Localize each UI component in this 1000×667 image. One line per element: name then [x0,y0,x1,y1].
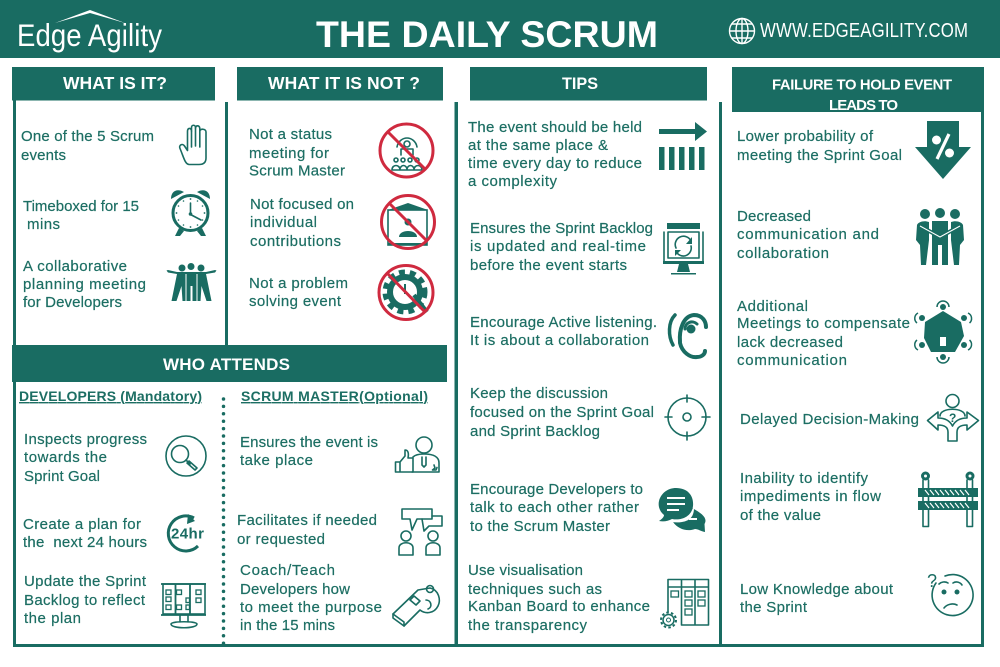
text: inability to identify impediments: Inability to identify [740,470,868,487]
text: collaborative planning meeting: planning meeting [23,276,146,293]
icon: speech bubbles [659,488,705,532]
text: ensures the event: take place [240,452,313,469]
header band [0,0,1000,58]
icon: 24 hours [168,514,204,551]
text: facilitates if needed: Facilitates if needed [237,512,377,529]
icon: confused face: ? [927,571,937,591]
icon: no status meeting [380,124,433,177]
text: not focused on individual contributions: individual [250,214,317,231]
text: same place and time [468,119,642,190]
heading: tips: TIPS [562,75,598,93]
text: sprint backlog updated: before the event starts [470,257,627,274]
text: decreased communication: collaboration [737,245,829,262]
text: not a status meeting: Scrum Master [249,162,345,180]
icon: whistle [393,586,439,626]
icon: 24 hours: 24hr [171,526,204,542]
text: low knowledge: Low Knowledge about [740,581,894,598]
text: collaborative planning meeting: for Developers [23,294,122,311]
text: active listening: It is about a collaboration [470,332,649,349]
text: additional meetings: Meetings to compensate [737,315,910,332]
text: update the sprint backlog: Update the Sprint [24,573,147,590]
text: inspects progress: Inspects progress [24,431,147,448]
text: decreased communication: communication and [737,226,879,243]
icon: round table meeting [915,301,972,363]
text: not a status meeting: Not a status [249,126,332,143]
icon: team of three [166,263,216,301]
text: visualisation techniques: the transparency [468,617,588,634]
text: visualisation techniques: Kanban Board to enhance [468,598,650,615]
text: encourage developers: to the Scrum Master [470,518,610,535]
text: focused on sprint goal: Keep the discussion [470,385,608,402]
text: one of the 5 scrum events: events [21,147,66,164]
heading: failure to hold event leads to: FAILURE TO HOLD EVENT [772,78,952,94]
text: additional meetings: Additional [737,298,808,315]
text: ensures the event [240,434,378,469]
panel: what is it [12,67,216,311]
text: ensures the event: Ensures the event is [240,434,378,451]
text: timeboxed for 15 mins [23,198,139,233]
icon: no problem solving [379,266,433,320]
heading: tips [470,67,707,100]
icon: road barrier [918,472,978,526]
text: facilitates if needed: or requested [237,531,325,548]
text: lower probability: meeting the Sprint Goal [737,147,902,164]
text: encourage developers [470,481,643,535]
text: focused on sprint goal: focused on the Sprint Goal [470,404,654,421]
text: same place and time: a complexity [468,173,558,190]
text: inspects progress [24,431,147,485]
text: additional meetings: communication [737,352,847,369]
text: additional meetings: lack decreased [737,334,843,351]
text: not a problem solving event: Not a problem [249,275,348,292]
icon: no individual contributions [382,196,434,248]
text: same place and time: time every day to reduce [468,155,642,172]
icon: crossroad decision [928,394,978,441]
text: not a status meeting [249,126,345,180]
text: not a problem solving event: solving event [249,293,342,310]
icon: scrum master thumbs up [396,437,439,472]
website link with globe icon: WWW.EDGEAGILITY.COM [760,19,968,41]
text: one of the 5 scrum events: One of the 5 Scrum [21,128,154,145]
icon: two people chatting [399,509,442,555]
icon: raised hand [180,125,206,164]
logo: Edge Agility: Edge Agility [17,18,162,53]
text: inspects progress: Sprint Goal [24,468,100,485]
text: sprint backlog updated: Ensures the Sprint Backlog [470,220,653,237]
panel: tips [468,67,710,634]
text: encourage developers: talk to each other rather [470,499,639,516]
panel: who attends [12,345,447,645]
text: low knowledge [740,581,894,616]
text: focused on sprint goal: and Sprint Backlog [470,423,600,440]
text: timeboxed for 15 mins: Timeboxed for 15 [23,198,139,215]
text: decreased communication: Decreased [737,208,811,225]
text: visualisation techniques [468,562,650,634]
title: THE DAILY SCRUM [316,13,658,55]
text: active listening: Encourage Active listening. [470,314,657,331]
text: inspects progress: towards the [24,449,107,466]
text: low knowledge: the Sprint [740,599,808,616]
heading: what it is not: WHAT IT IS NOT ? [268,73,420,93]
text: not a problem solving event [249,275,348,310]
text: not focused on individual contributions [250,196,354,250]
icon: ear [669,315,706,357]
text: additional meetings [737,298,910,369]
text: not focused on individual contributions: Not focused on [250,196,354,213]
text: sprint backlog updated: is updated and real-time [470,238,646,255]
text: coach and teach developers [240,562,382,634]
text: inability to identify impediments: impediments in flow [740,488,881,505]
text: active listening [470,314,657,349]
icon: kanban board and gear [661,580,708,628]
text: facilitates if needed [237,512,377,548]
text: create a plan [23,516,147,551]
heading: what it is not [237,67,443,100]
text: not focused on individual contributions: contributions [250,233,341,250]
text: update the sprint backlog: Backlog to reflect [24,592,146,609]
heading: who attends [12,345,447,382]
text: collaborative planning meeting [23,258,146,311]
icon: alarm clock [171,190,210,236]
heading: failure to hold event leads to [732,67,984,114]
text: delayed decision making: Delayed Decision-Making [740,411,919,428]
icon: team embrace [916,208,964,265]
text: one of the 5 scrum events [21,128,154,164]
subheading: scrum master optional: SCRUM MASTER(Optional) [241,388,428,404]
text: lower probability: Lower probability of [737,128,874,145]
icon: arrow over bars [659,122,707,170]
text: same place and time: The event should be held [468,119,642,136]
text: focused on sprint goal [470,385,654,440]
text: same place and time: at the same place & [468,137,608,154]
icon: sprint board monitor [161,584,206,628]
icon: target [665,395,710,440]
text: timeboxed for 15 mins: mins [27,216,60,233]
icon: magnifier [166,436,206,476]
text: visualisation techniques: Use visualisation [468,562,583,579]
icon: monitor with refresh [663,223,704,274]
text: coach and teach developers: Developers how [240,581,350,598]
text: sprint backlog updated [470,220,653,274]
panel: failure to hold event [732,67,984,616]
heading: what is it [12,67,215,100]
icon: crossroad decision: ? [949,411,956,425]
text: inability to identify impediments: of the value [740,507,821,524]
heading: failure to hold event leads to: LEADS TO [829,97,898,114]
text: update the sprint backlog: the plan [24,610,81,627]
text: coach and teach developers: to meet the purpose [240,599,382,616]
icon: confused face [927,571,973,616]
panel: what it is not [237,67,443,320]
text: visualisation techniques: techniques such as [468,581,602,598]
text: encourage developers: Encourage Developers to [470,481,643,498]
text: inability to identify impediments [740,470,881,524]
heading: what is it: WHAT IS IT? [63,73,167,93]
text: update the sprint backlog [24,573,147,627]
text: coach and teach developers: Coach/Teach [240,562,335,579]
text: collaborative planning meeting: A collaborative [23,258,127,275]
text: coach and teach developers: in the 15 mins [240,617,335,634]
subheading: developers mandatory: DEVELOPERS (Mandatory) [19,388,202,404]
text: create a plan: the next 24 hours [23,534,147,551]
text: lower probability [737,128,902,164]
text: create a plan: Create a plan for [23,516,141,533]
heading: who attends: WHO ATTENDS [163,355,290,374]
text: decreased communication [737,208,879,262]
text: not a status meeting: meeting for [249,145,329,162]
icon: percent down arrow [915,121,971,179]
